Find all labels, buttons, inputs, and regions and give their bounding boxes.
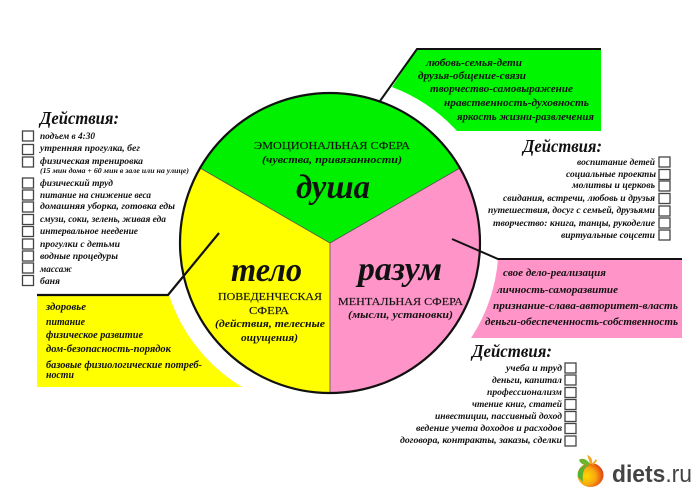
panel: soul values [380,49,601,131]
icon: apple [578,455,604,487]
checklist: body actions: питание на снижение веса [40,190,152,200]
label: mental sphere: (мысли, установки) [348,310,453,321]
panel: soul values: нравственность-духовность [444,98,589,109]
checklist: mind actions: деньги, капитал [492,375,562,385]
panel: soul values: яркость жизни-развлечения [456,112,594,123]
panel: mind values: свое дело-реализация [503,268,606,279]
checklist: soul actions: молитвы и церковь [571,180,655,190]
checklist: soul actions: воспитание детей [577,157,655,167]
checklist: body actions: утренняя прогулка, бег [39,143,141,153]
label: emotional sphere: душа [296,169,370,206]
panel: mind values [471,259,682,338]
leader line: mind [452,239,682,259]
label: mental sphere: МЕНТАЛЬНАЯ СФЕРА [338,296,463,308]
checklist: mind actions [400,341,576,446]
checklist: mind actions: Действия: [470,341,552,361]
label: behavioural sphere: СФЕРА [249,305,289,317]
label: mental sphere: разум [355,251,442,288]
checklist: soul actions: виртуальные соцсети [561,230,655,240]
checklist: soul actions: путешествия, досуг с семьей, друзьями [488,205,655,215]
label: behavioural sphere: ощущения) [241,333,298,344]
sector: soul [200,93,460,243]
panel: body values: здоровье [45,302,87,313]
checklist: body actions [22,108,189,286]
label: mental sphere [338,251,463,321]
checklist: mind actions: чтение книг, статей [472,399,562,409]
panel: body values: ности [46,370,74,381]
checklist: mind actions: профессионализм [487,387,562,397]
checklist: body actions: баня [40,276,60,286]
panel: soul values: любовь-семья-дети [425,58,522,69]
checklist: soul actions: Действия: [521,136,602,156]
checklist: body actions: интервальное неедение [40,226,138,236]
panel: body values [37,295,242,387]
logo: diets.ru [578,455,692,488]
panel: mind values: личность-саморазвитие [496,285,619,296]
checklist: body actions: физический труд [40,178,114,188]
label: behavioural sphere: ПОВЕДЕНЧЕСКАЯ [218,291,323,303]
checklist: soul actions [488,136,670,240]
checklist: body actions: смузи, соки, зелень, живая еда [40,214,167,224]
label: behavioural sphere: тело [231,252,302,289]
checklist: body actions: физическая тренировка [40,156,144,166]
checklist: body actions: Действия: [38,108,119,128]
checklist: body actions: прогулки с детьми [40,239,120,249]
sector: body [180,168,330,393]
label: behavioural sphere [215,252,325,344]
checklist: body actions: домашняя уборка, готовка еды [40,201,175,211]
panel: body values: базовые физиологические потреб- [46,360,202,371]
checklist: body actions: (15 мин дома + 60 мин в зале или на улице) [40,167,189,175]
panel: body values: питание [46,317,86,328]
checklist: body actions: подъем в 4:30 [40,131,96,141]
sector: mind [330,168,480,393]
label: emotional sphere: (чувства, привязанности) [262,155,402,166]
panel: soul values: творчество-самовыражение [430,84,574,95]
checklist: mind actions: инвестиции, пассивный доход [435,411,563,421]
label: emotional sphere [254,140,410,206]
circle diagram [37,93,682,393]
panel: soul values: друзья-общение-связи [418,71,526,82]
checklist: body actions: водные процедуры [40,251,118,261]
checklist: soul actions: свидания, встречи, любовь и друзья [503,193,655,203]
checklist: mind actions: учеба и труд [505,363,563,373]
checklist: soul actions: творчество: книга, танцы, рукоделие [493,218,655,228]
checklist: mind actions: ведение учета доходов и расходов [416,423,562,433]
checklist: body actions: массаж [39,264,72,274]
checklist: mind actions: договора, контракты, заказы, сделки [400,435,562,445]
label: emotional sphere: ЭМОЦИОНАЛЬНАЯ СФЕРА [254,140,410,152]
label: behavioural sphere: (действия, телесные [215,319,325,330]
panel: mind values: признание-слава-авторитет-власть [493,301,678,312]
panel: body values: физическое развитие [46,330,144,341]
text: diets.ru wordmark: diets.ru [612,461,692,488]
panel: mind values: деньги-обеспеченность-собственность [485,317,678,328]
leader line: body [37,233,219,295]
panel: body values: дом-безопасность-порядок [46,344,172,355]
checklist: soul actions: социальные проекты [566,169,656,179]
